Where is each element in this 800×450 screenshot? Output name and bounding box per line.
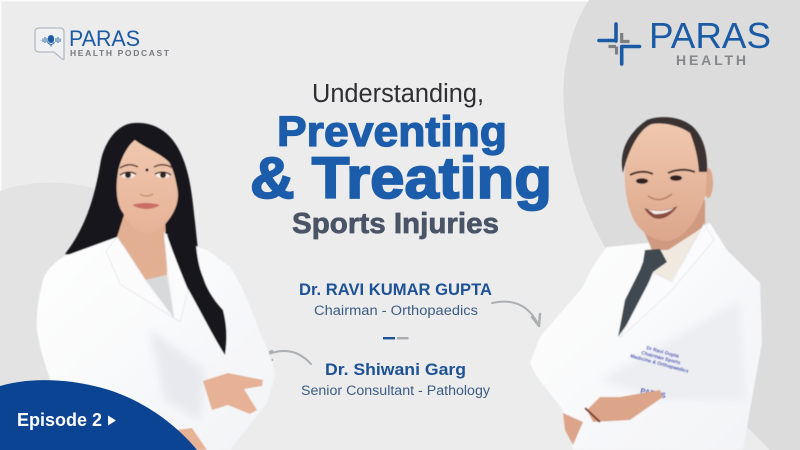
eyes and brows [120, 165, 173, 178]
coat shading [150, 330, 205, 420]
logo: Paras Health Podcast [35, 26, 170, 60]
logo: Paras Health [599, 15, 771, 68]
arrow: to left doctor [260, 351, 311, 364]
face [625, 122, 706, 241]
coat badge text [630, 342, 692, 375]
episode label: Episode 2 [17, 410, 102, 430]
portrait: Dr. Ravi Kumar Gupta [530, 117, 762, 450]
background shape: right grey blob [563, 0, 800, 450]
doctor credit: Ravi Kumar Gupta [299, 280, 492, 318]
name: Dr. RAVI KUMAR GUPTA [299, 280, 492, 299]
lower hand [177, 428, 207, 450]
neck [117, 215, 167, 280]
ear [703, 168, 713, 198]
nose shade [648, 194, 672, 200]
coat [37, 235, 275, 450]
divider dashes [383, 337, 408, 339]
hand [203, 373, 263, 414]
wordmark HEALTH: HEALTH [676, 52, 746, 68]
lips [132, 203, 160, 209]
title [250, 80, 552, 240]
role: Chairman - Orthopaedics [314, 303, 478, 318]
background shape: left grey circle [0, 183, 100, 400]
doctor credit: Shiwani Garg [301, 360, 490, 398]
name: Dr. Shiwani Garg [325, 360, 466, 379]
hair [622, 117, 707, 173]
portrait: Dr. Shiwani Garg [37, 123, 275, 450]
neck [640, 200, 705, 250]
arrow: to right doctor [492, 302, 540, 326]
brows and eyes [630, 170, 695, 184]
icon: speech bubble with microphone [35, 28, 64, 60]
coat badge text: Chairman Sports [641, 350, 681, 366]
blue corner [0, 380, 197, 450]
lapel left [106, 237, 174, 318]
wordmark PARAS: PARAS [69, 26, 140, 51]
coat [530, 223, 762, 450]
episode badge [0, 380, 197, 450]
nose shade [140, 194, 153, 196]
right lapel [620, 224, 714, 338]
forearm [587, 390, 663, 422]
face [117, 140, 178, 234]
wordmark PARAS: PARAS [649, 15, 771, 56]
shirt collar [648, 230, 702, 283]
title line: Sports Injuries: Sports Injuries [292, 208, 499, 240]
smile [644, 206, 678, 219]
lower hand [563, 413, 583, 445]
coat logo: PARAS [640, 386, 667, 400]
wristband [585, 408, 600, 422]
lapel right [164, 233, 188, 322]
coat badge text: Dr Ravi Gupta [646, 345, 680, 360]
hair over shoulder [167, 235, 226, 355]
coat shading [600, 300, 745, 400]
play triangle [108, 416, 116, 426]
title line: & Treating: & Treating [250, 146, 552, 211]
lace top [146, 275, 174, 318]
icon: double cross [599, 24, 640, 64]
wordmark Health Podcast: HEALTH PODCAST [70, 48, 170, 58]
tie [618, 249, 667, 337]
title line: Preventing: Preventing [277, 108, 507, 156]
role: Senior Consultant - Pathology [301, 383, 490, 398]
coat badge text: Medicine & Orthopaedics [630, 353, 689, 375]
hair back [65, 123, 226, 355]
title line: Understanding: Understanding, [312, 80, 484, 108]
